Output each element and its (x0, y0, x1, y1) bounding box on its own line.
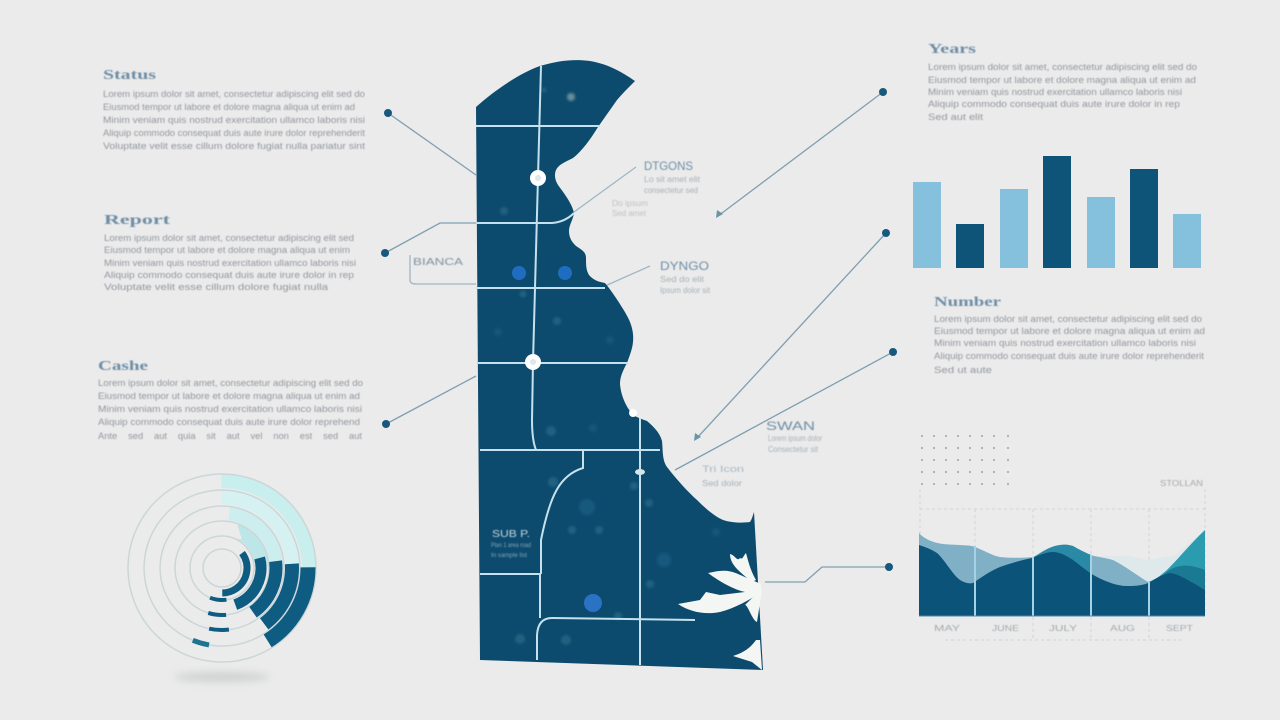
panel: lower left text: Eiusmod tempor ut labore et dolore magna aliqua ut enim ad (98, 391, 360, 401)
panel: mid right text: Aliquip commodo consequat duis aute irure dolor reprehenderit (934, 351, 1205, 361)
small labels around map: DYNGO (660, 259, 709, 273)
panel: lower left text: Minim veniam quis nostrud exercitation ullamco laboris nisi (98, 404, 362, 414)
map location pins (512, 170, 645, 612)
panel: middle left text: Minim veniam quis nostrud exercitation ullamco laboris nisi (104, 258, 356, 268)
panel: lower left text: Ante sed aut quia sit aut vel non est sed aut (98, 431, 363, 441)
panel: top left text: Eiusmod tempor ut labore et dolore magna aliqua ut enim ad (103, 102, 355, 112)
panel: middle left text: Lorem ipsum dolor sit amet, consectetur adipiscing elit sed (104, 233, 354, 243)
area chart labels (934, 479, 1203, 633)
panel: top left text: Lorem ipsum dolor sit amet, consectetur adipiscing elit sed do (103, 89, 365, 99)
connector lines (381, 88, 897, 582)
map texture spots (494, 88, 720, 645)
small labels around map: SWAN (766, 419, 815, 433)
panel: lower left text: Aliquip commodo consequat duis aute irure dolor reprehend (98, 417, 360, 427)
panel: top left text: Voluptate velit esse cillum dolore fugiat nulla pariatur sint (103, 141, 366, 151)
dot grid (921, 435, 1009, 485)
small labels around map: Sed dolor (702, 479, 742, 488)
panel: mid right text: Eiusmod tempor ut labore et dolore magna aliqua ut enim ad (934, 326, 1205, 336)
map roads (476, 66, 695, 665)
panel: lower left text: Cashe (98, 359, 148, 374)
panel: top right text: Eiusmod tempor ut labore et dolore magna aliqua ut enim ad (928, 75, 1196, 85)
small labels around map: Lo sit amet elit (644, 175, 701, 184)
panel: top right text (928, 42, 1197, 122)
small labels around map: Sed amet (612, 209, 647, 218)
map inset label: Plan 1 area road (491, 543, 531, 549)
panel: lower left text (98, 359, 363, 441)
panel: middle left text (104, 213, 356, 292)
panel: middle left text: Aliquip commodo consequat duis aute irure dolor in rep (104, 270, 354, 280)
panel: middle left text: Voluptate velit esse cillum dolore fugiat nulla (104, 282, 328, 292)
area chart labels: SEPT (1166, 624, 1193, 633)
map of Delaware (476, 60, 763, 670)
map white river shapes (678, 553, 762, 670)
panel: mid right text: Number (934, 295, 1001, 310)
small labels around map: Lorem ipsum dolor (768, 434, 822, 443)
bar chart (913, 156, 1201, 268)
map inset label: SUB P. (492, 529, 530, 540)
area chart labels: JULY (1049, 624, 1078, 633)
map inset label (491, 529, 531, 559)
panel: top left text (103, 68, 366, 151)
area chart (919, 489, 1205, 640)
panel: top right text: Sed aut elit (928, 112, 984, 122)
small labels around map: BIANCA (413, 257, 463, 268)
panel: mid right text (934, 295, 1205, 375)
area chart labels: JUNE (992, 624, 1019, 633)
small labels around map: Ipsum dolor sit (660, 286, 711, 295)
small labels around map: Sed do elit (660, 275, 705, 284)
panel: top left text: Minim veniam quis nostrud exercitation ullamco laboris nisi (103, 115, 365, 125)
panel: mid right text: Minim veniam quis nostrud exercitation ullamco laboris nisi (934, 338, 1196, 348)
panel: top right text: Lorem ipsum dolor sit amet, consectetur adipiscing elit sed do (928, 62, 1197, 72)
panel: top left text: Aliquip commodo consequat duis aute irure dolor reprehenderit (103, 128, 366, 138)
panel: top right text: Aliquip commodo consequat duis aute irure dolor in rep (928, 99, 1180, 109)
small labels around map: Consectetur sit (768, 445, 819, 454)
panel: middle left text: Eiusmod tempor ut labore et dolore magna aliqua ut enim (104, 245, 350, 255)
small labels around map: DTGONS (644, 159, 693, 173)
area chart labels: MAY (934, 624, 961, 633)
radial chart (128, 474, 316, 682)
panel: middle left text: Report (104, 213, 171, 228)
small labels around map: Do ipsum (612, 199, 648, 208)
small labels around map (413, 159, 822, 488)
map inset label: In sample list (491, 553, 527, 559)
area chart labels: STOLLAN (1160, 479, 1203, 488)
area chart labels: AUG (1110, 624, 1135, 633)
panel: mid right text: Sed ut aute (934, 365, 992, 375)
panel: top right text: Years (928, 42, 977, 57)
small labels around map: Tri Icon (702, 464, 744, 474)
panel: top right text: Minim veniam quis nostrud exercitation ullamco laboris nisi (928, 87, 1182, 97)
panel: top left text: Status (103, 68, 157, 83)
panel: mid right text: Lorem ipsum dolor sit amet, consectetur adipiscing elit sed do (934, 314, 1202, 324)
small labels around map: consectetur sed (644, 186, 698, 195)
panel: lower left text: Lorem ipsum dolor sit amet, consectetur adipiscing elit sed do (98, 378, 363, 388)
